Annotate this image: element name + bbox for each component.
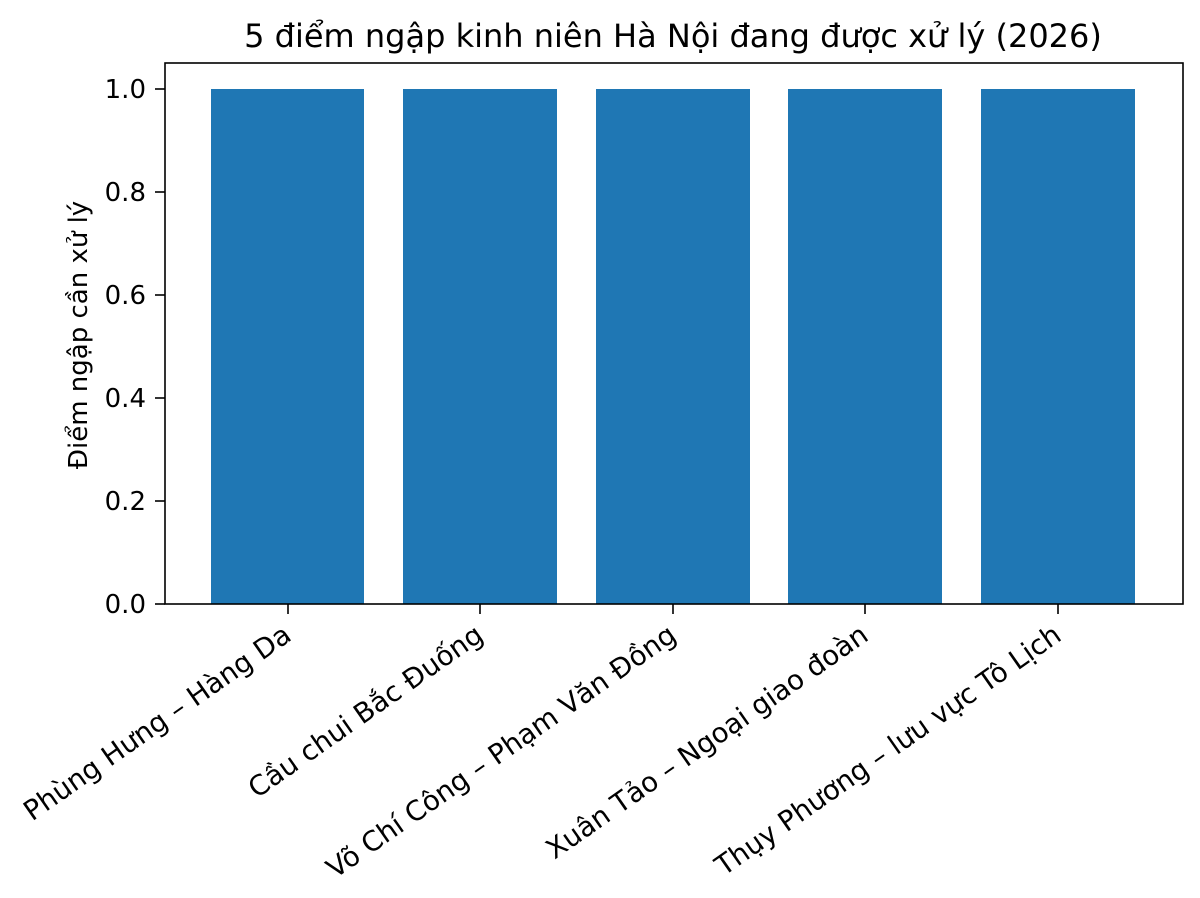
y axis ticks and labels: 0.4 [105, 384, 146, 414]
bars [211, 89, 1135, 604]
x axis ticks and labels: Xuân Tảo – Ngoại giao đoàn [540, 619, 874, 866]
x axis ticks and labels: Võ Chí Công – Phạm Văn Đồng [321, 619, 682, 885]
x axis ticks and labels: Thụy Phương – lưu vực Tô Lịch [709, 619, 1067, 883]
y axis ticks and labels: 0.6 [105, 281, 146, 311]
y axis ticks and labels [105, 75, 165, 620]
x axis ticks and labels [18, 604, 1067, 885]
x axis ticks and labels: Cầu chui Bắc Đuống [242, 618, 489, 805]
y axis ticks and labels: 0.2 [105, 487, 146, 517]
y axis ticks and labels: 0.8 [105, 178, 146, 208]
title: 5 điểm ngập kinh niên Hà Nội đang được xử lý (2026) [244, 17, 1102, 55]
y axis label: Điểm ngập cần xử lý [63, 201, 94, 469]
y axis ticks and labels: 1.0 [105, 75, 146, 105]
y axis ticks and labels: 0.0 [105, 590, 146, 620]
x axis ticks and labels: Phùng Hưng – Hàng Da [18, 619, 297, 827]
